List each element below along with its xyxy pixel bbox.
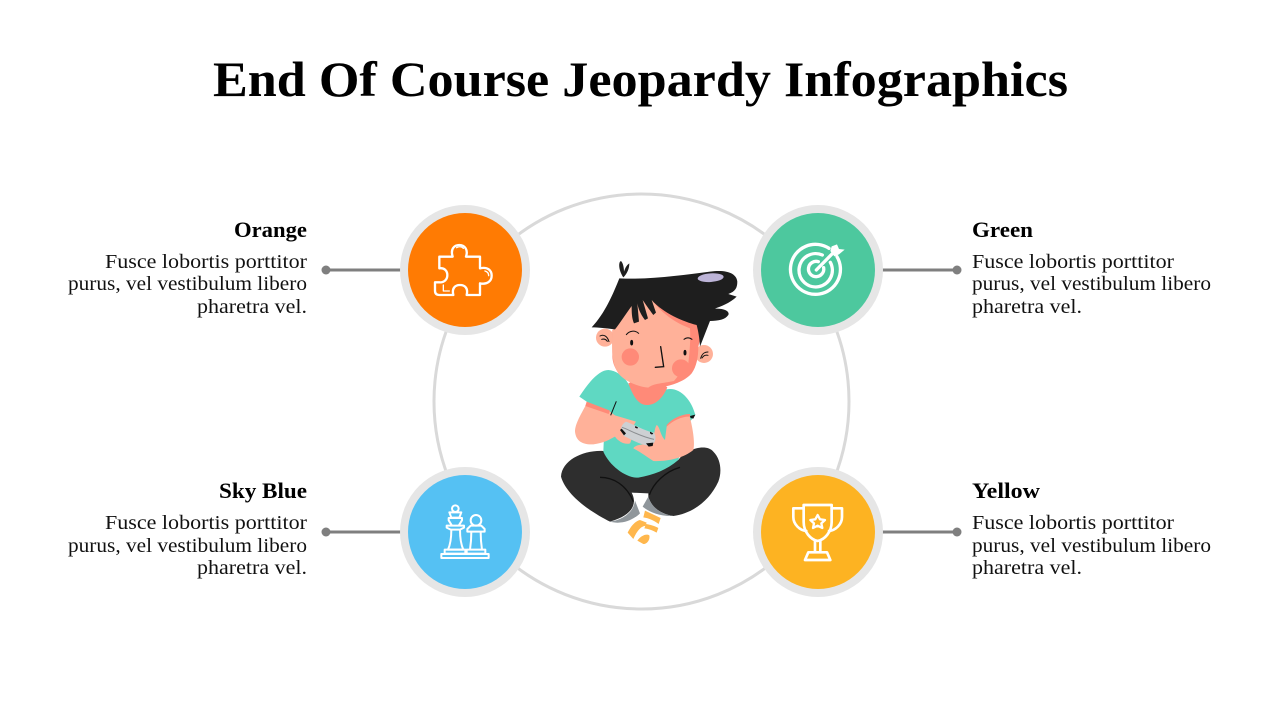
description bbox=[972, 251, 1211, 318]
left arm bbox=[575, 403, 636, 444]
badge bbox=[400, 467, 530, 597]
description: purus, vel vestibulum libero bbox=[972, 273, 1211, 295]
leader line bbox=[879, 528, 962, 536]
description: Fusce lobortis porttitor bbox=[972, 251, 1174, 273]
item: Sky Blue bbox=[68, 467, 530, 597]
description bbox=[972, 512, 1211, 579]
leader line bbox=[881, 266, 962, 274]
description: purus, vel vestibulum libero bbox=[972, 535, 1211, 557]
title: End Of Course Jeopardy Infographics bbox=[213, 51, 1068, 107]
game controller bbox=[621, 422, 655, 446]
description: pharetra vel. bbox=[972, 557, 1082, 579]
central ring bbox=[434, 194, 849, 609]
character head bbox=[592, 261, 737, 388]
character body bbox=[561, 370, 720, 544]
sleeve shadows bbox=[585, 402, 690, 427]
description bbox=[68, 251, 307, 318]
ears bbox=[596, 329, 713, 363]
badge bbox=[753, 205, 883, 335]
right arm bbox=[633, 415, 694, 461]
leader line bbox=[322, 528, 406, 536]
description: purus, vel vestibulum libero bbox=[68, 273, 307, 295]
badge bbox=[400, 205, 530, 335]
heading: Yellow bbox=[972, 478, 1040, 503]
face bbox=[612, 297, 690, 388]
leader line bbox=[322, 266, 402, 274]
shirt bbox=[579, 370, 695, 478]
item: Orange bbox=[68, 205, 530, 335]
hair highlight bbox=[697, 272, 724, 283]
description: pharetra vel. bbox=[197, 296, 307, 318]
hair tuft bbox=[619, 261, 629, 277]
icon: trophy bbox=[793, 505, 842, 560]
item: Green bbox=[753, 205, 1211, 335]
description: Fusce lobortis porttitor bbox=[105, 251, 307, 273]
trouser cuffs bbox=[610, 497, 673, 523]
icon: chess pieces bbox=[441, 505, 489, 558]
socks bbox=[628, 511, 661, 544]
item: Yellow bbox=[753, 467, 1211, 597]
description: Fusce lobortis porttitor bbox=[105, 512, 307, 534]
badge bbox=[753, 467, 883, 597]
icon: target with arrow bbox=[790, 244, 845, 294]
icon: puzzle piece bbox=[435, 245, 492, 295]
description: pharetra vel. bbox=[972, 296, 1082, 318]
description: Fusce lobortis porttitor bbox=[972, 512, 1174, 534]
description bbox=[68, 512, 307, 579]
description: pharetra vel. bbox=[197, 557, 307, 579]
facial features bbox=[600, 331, 708, 367]
trousers bbox=[561, 448, 720, 522]
heading: Orange bbox=[234, 217, 307, 242]
face shadow bbox=[612, 300, 707, 388]
cheeks bbox=[622, 348, 690, 377]
description: purus, vel vestibulum libero bbox=[68, 535, 307, 557]
controller buttons and fold lines bbox=[600, 401, 695, 502]
neck bbox=[628, 373, 667, 405]
heading: Green bbox=[972, 217, 1033, 242]
hair bbox=[592, 271, 737, 347]
character: boy playing a video game bbox=[561, 261, 737, 544]
heading: Sky Blue bbox=[219, 478, 307, 503]
